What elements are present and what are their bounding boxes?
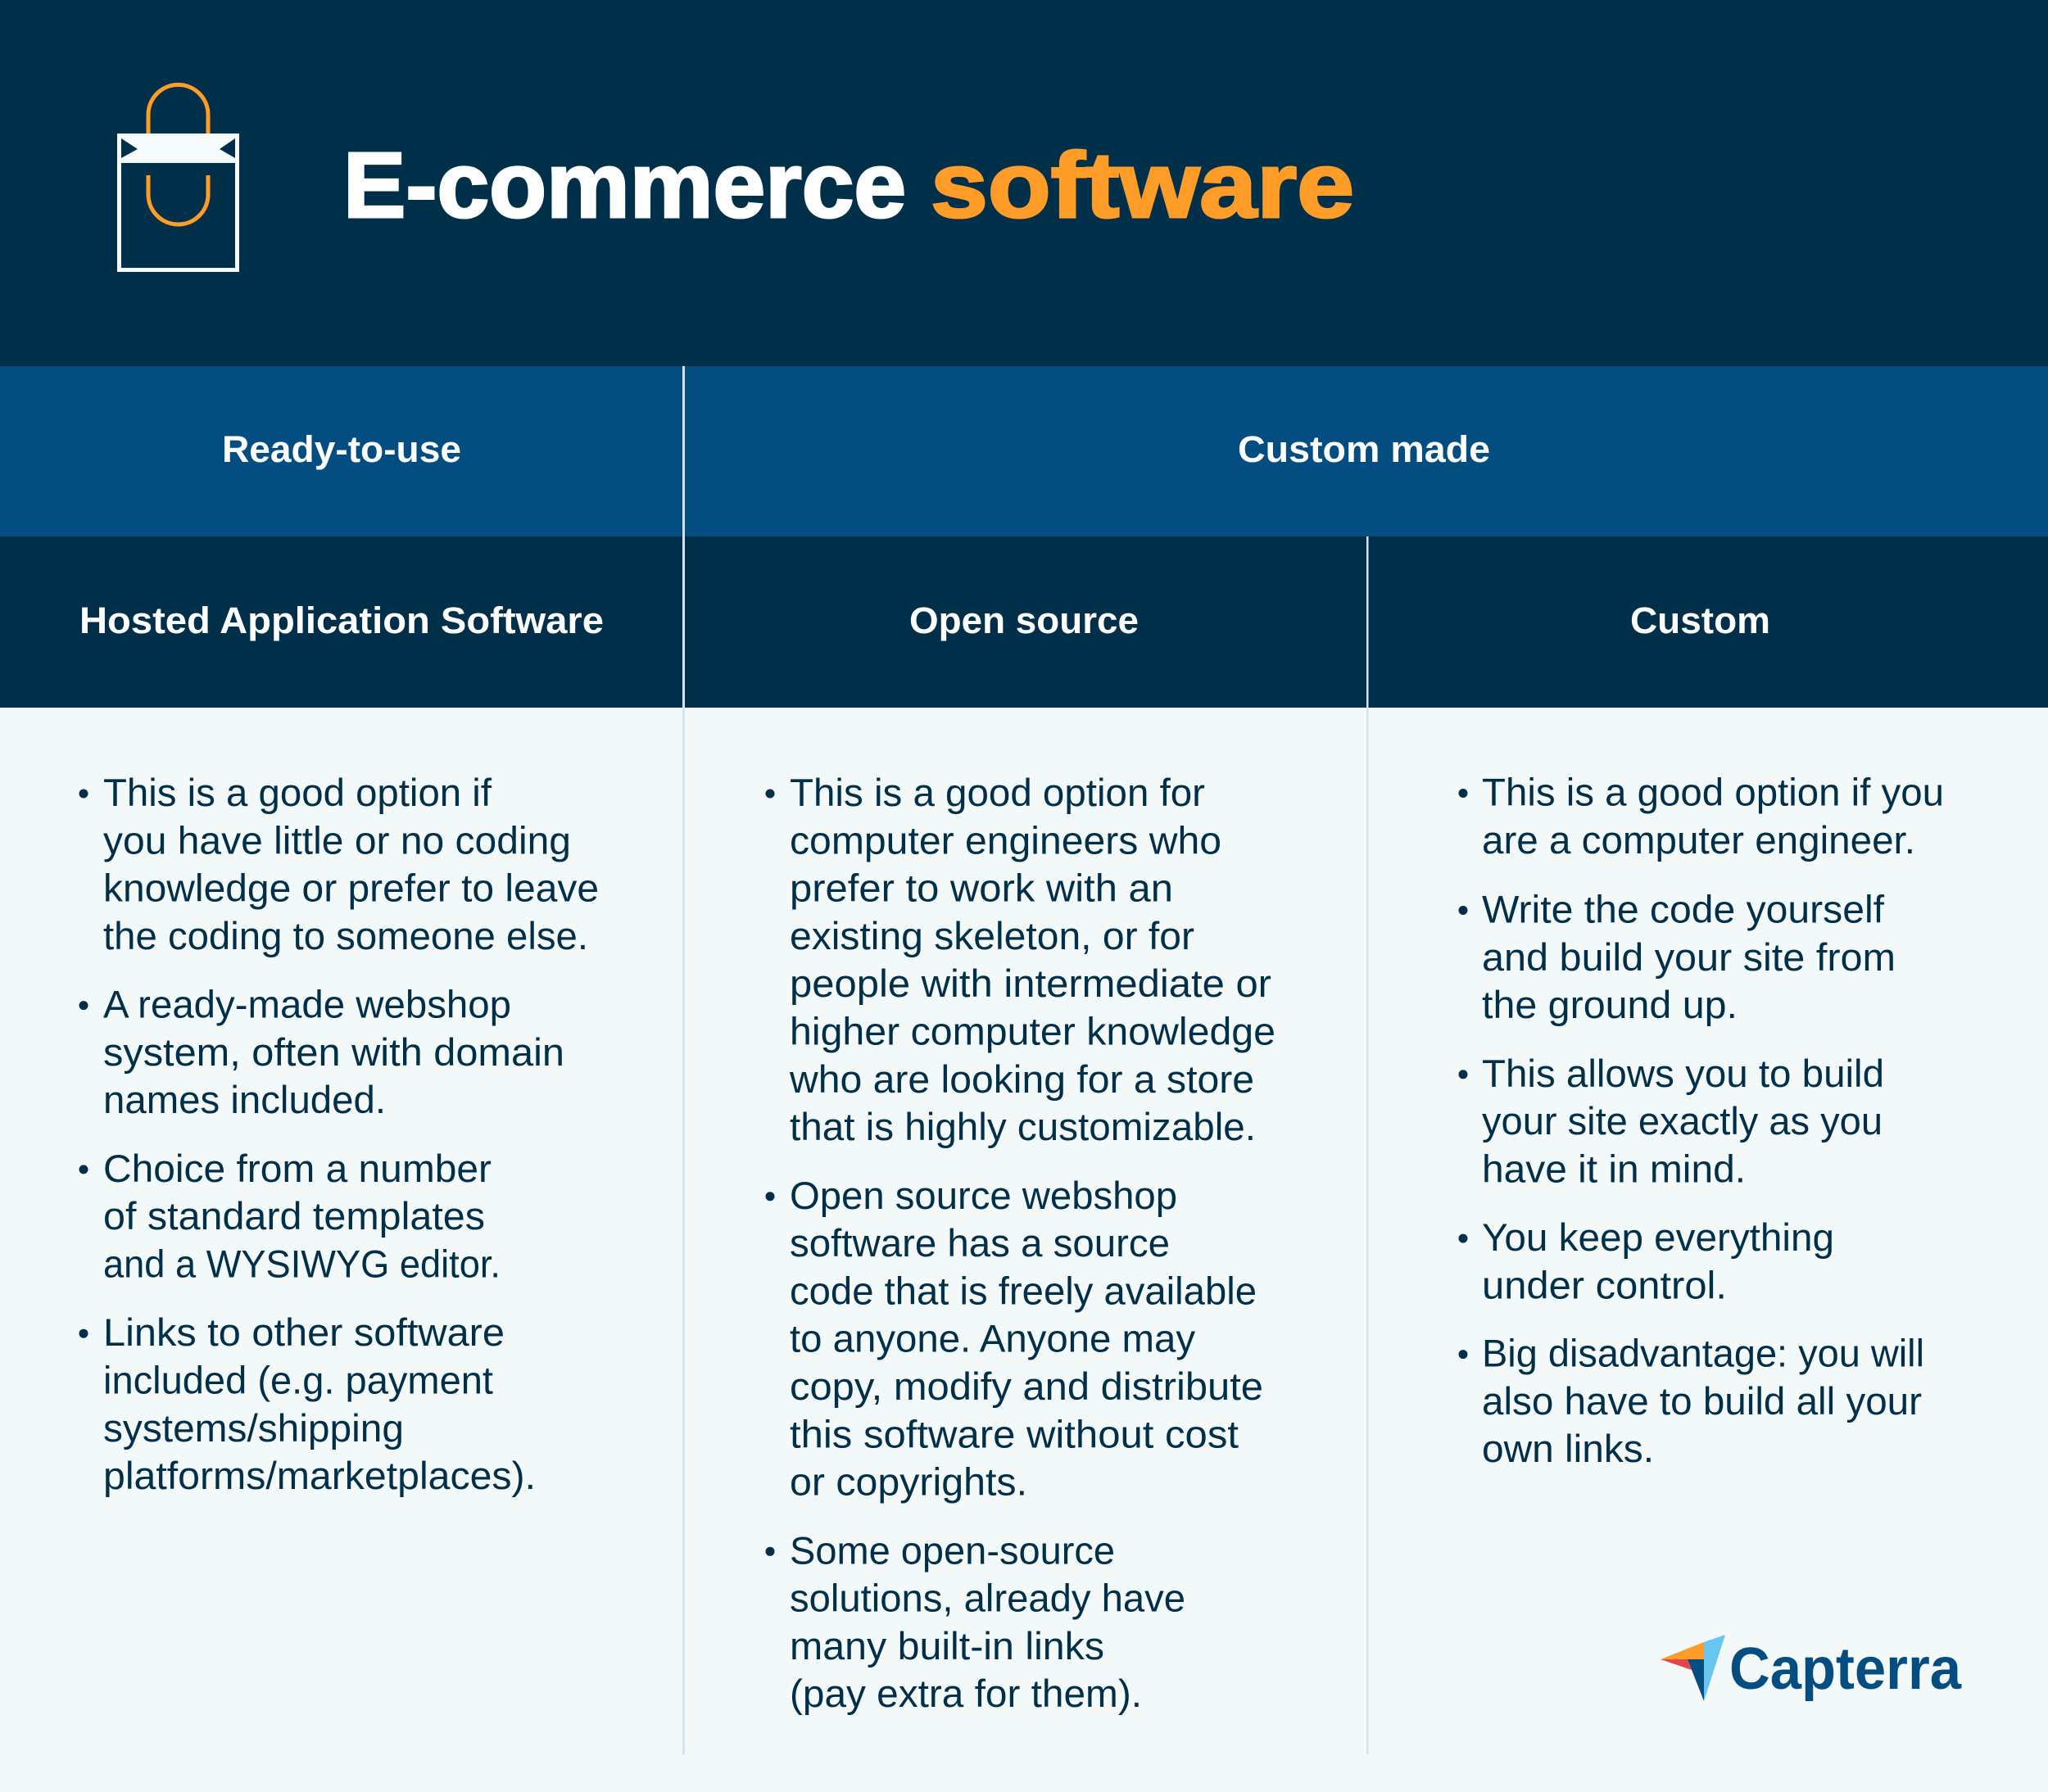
title	[343, 133, 1354, 237]
sub-heading band	[0, 536, 2048, 708]
panel: open source bullets: prefer to work with an	[790, 867, 1173, 910]
logo: Capterra: Capterra	[1729, 1636, 1962, 1702]
panel: hosted application software bullets: knowledge or prefer to leave	[103, 867, 599, 910]
heading: Custom: Custom	[1630, 600, 1770, 641]
title: software	[931, 133, 1354, 237]
panel: hosted application software bullets: A ready-made webshop	[103, 983, 511, 1026]
panel: open source bullets: to anyone. Anyone may	[790, 1317, 1195, 1360]
panel: open source bullets: code that is freely available	[790, 1269, 1257, 1312]
panel: custom bullets	[1458, 770, 1944, 1470]
panel: custom bullets: and build your site from	[1482, 935, 1896, 979]
heading: Hosted Application Software: Hosted Application Software	[79, 600, 604, 641]
panel: open source bullets: higher computer knowledge	[790, 1009, 1275, 1053]
panel: hosted application software bullets: Choice from a number	[103, 1147, 492, 1190]
icon: shopping bag	[119, 85, 238, 270]
panel: hosted application software bullets: included (e.g. payment	[103, 1358, 493, 1402]
panel: open source bullets: software has a source	[790, 1221, 1170, 1265]
panel: open source bullets: people with intermediate or	[790, 962, 1271, 1005]
panel: hosted application software bullets: systems/shipping	[103, 1406, 404, 1450]
panel: open source bullets: Some open-source	[790, 1528, 1115, 1572]
panel: open source bullets: existing skeleton, or for	[790, 914, 1194, 957]
panel: hosted application software bullets: you have little or no coding	[103, 818, 571, 862]
panel: custom bullets: You keep everything	[1482, 1215, 1834, 1259]
panel: custom bullets: Write the code yourself	[1482, 888, 1885, 930]
title: E-commerce	[343, 133, 906, 237]
panel: hosted application software bullets: names included.	[103, 1078, 386, 1121]
panel: custom bullets: are a computer engineer.	[1482, 818, 1915, 862]
panel: hosted application software bullets: system, often with domain	[103, 1030, 564, 1074]
panel: open source bullets: copy, modify and distribute	[790, 1364, 1263, 1408]
panel: hosted application software bullets: This is a good option if	[103, 771, 492, 814]
panel: custom bullets: also have to build all your	[1482, 1379, 1922, 1423]
panel: open source bullets	[765, 771, 1275, 1715]
panel: hosted application software bullets: and a WYSIWYG editor.	[103, 1242, 501, 1286]
header panel	[0, 0, 2048, 366]
panel: open source bullets: This is a good option for	[790, 771, 1205, 814]
panel: custom bullets: This allows you to build	[1482, 1052, 1884, 1095]
heading: Open source: Open source	[909, 600, 1139, 641]
panel: hosted application software bullets	[79, 771, 599, 1497]
panel: custom bullets: your site exactly as you	[1482, 1099, 1883, 1143]
panel: custom bullets: Big disadvantage: you will	[1482, 1332, 1924, 1375]
panel: open source bullets: solutions, already have	[790, 1577, 1185, 1620]
panel: hosted application software bullets: of standard templates	[103, 1194, 485, 1238]
heading: Custom made: Custom made	[1238, 428, 1490, 470]
panel: open source bullets: who are looking for a store	[789, 1057, 1254, 1101]
heading: Ready-to-use: Ready-to-use	[222, 428, 461, 470]
panel: custom bullets: have it in mind.	[1482, 1147, 1746, 1190]
panel: open source bullets: (pay extra for them).	[790, 1672, 1142, 1715]
panel: custom bullets: This is a good option if you	[1482, 770, 1944, 814]
panel: open source bullets: that is highly customizable.	[790, 1105, 1256, 1148]
panel: hosted application software bullets: platforms/marketplaces).	[103, 1454, 536, 1497]
category band	[0, 366, 2048, 536]
panel: hosted application software bullets: the coding to someone else.	[103, 914, 588, 957]
panel: open source bullets: Open source webshop	[790, 1174, 1177, 1217]
panel: open source bullets: or copyrights.	[790, 1460, 1027, 1504]
column divider 2	[1366, 536, 1368, 1754]
column divider 1	[682, 366, 685, 1754]
panel: open source bullets: many built-in links	[790, 1624, 1104, 1668]
panel: custom bullets: own links.	[1482, 1427, 1654, 1470]
panel: open source bullets: computer engineers who	[790, 818, 1221, 862]
panel: custom bullets: under control.	[1482, 1263, 1727, 1306]
panel: hosted application software bullets: Links to other software	[103, 1310, 505, 1354]
panel: custom bullets: the ground up.	[1482, 983, 1738, 1026]
panel: open source bullets: this software without cost	[790, 1412, 1239, 1455]
